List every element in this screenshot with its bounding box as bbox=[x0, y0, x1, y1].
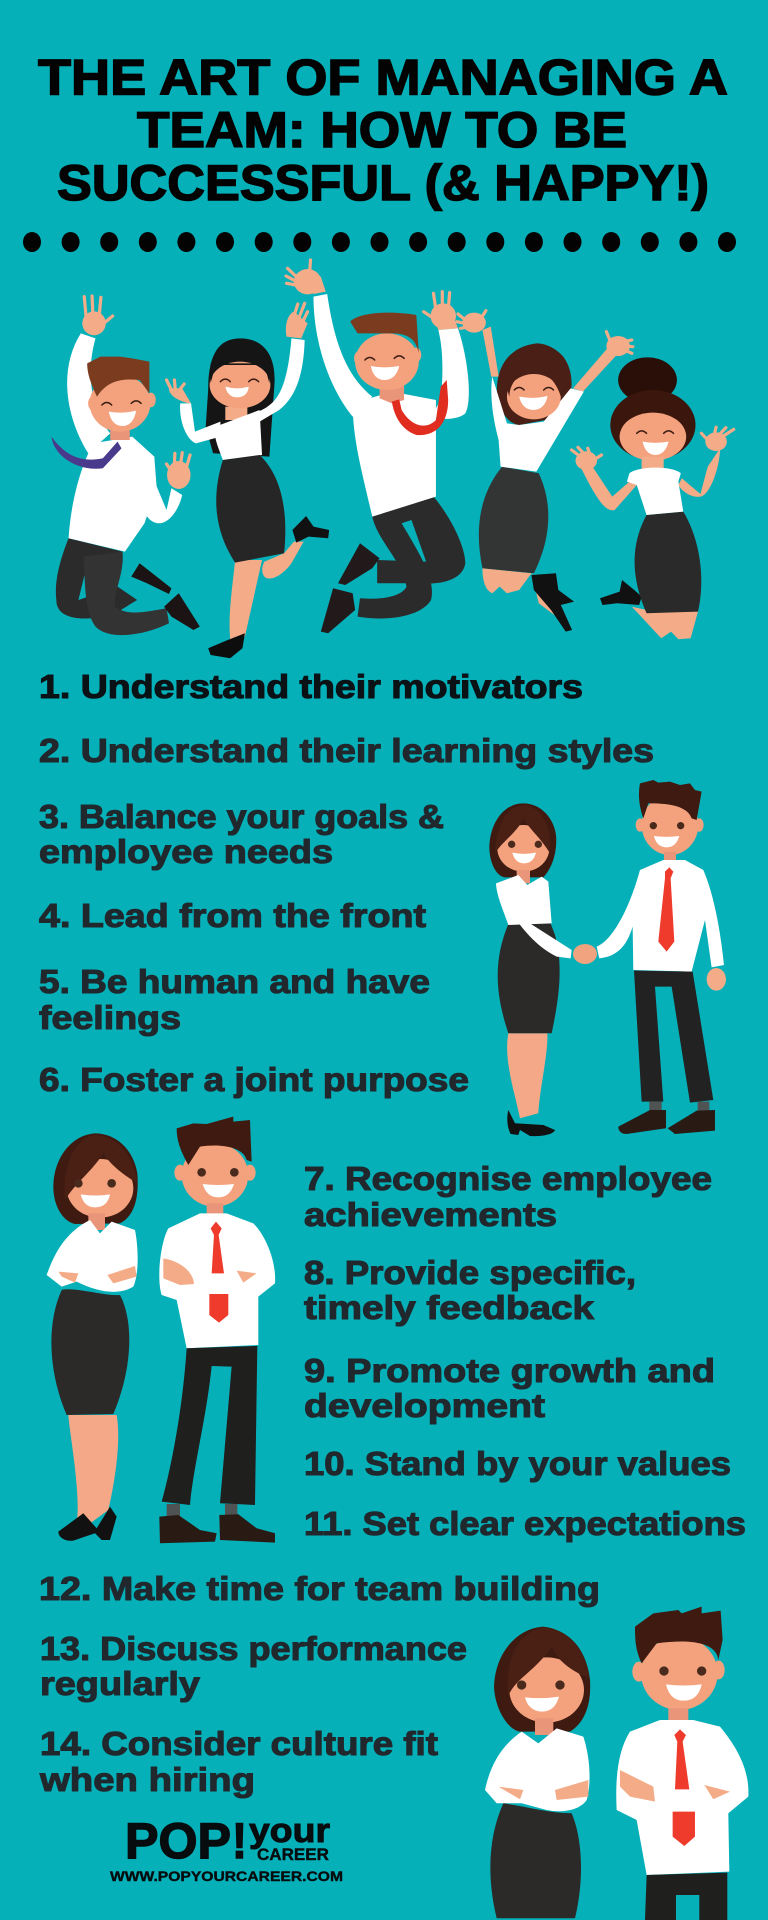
figure: woman with hair bun bbox=[572, 357, 734, 639]
logo: Pop Your Career: CAREER bbox=[257, 1845, 329, 1864]
list items 1 to 6: feelings bbox=[39, 999, 181, 1036]
title: THE ART OF MANAGING A bbox=[38, 50, 728, 106]
illustration: handshake bbox=[489, 780, 726, 1136]
logo: Pop Your Career: your bbox=[249, 1812, 330, 1850]
list items 12 to 14: 14. Consider culture fit bbox=[40, 1725, 438, 1762]
illustration: five jumping colleagues bbox=[51, 260, 734, 658]
list items 12 to 14: regularly bbox=[40, 1665, 201, 1702]
list items 7 to 11: 9. Promote growth and bbox=[304, 1352, 715, 1389]
logo: Pop Your Career: WWW.POPYOURCAREER.COM bbox=[110, 1868, 343, 1884]
list items 12 to 14 bbox=[39, 1570, 600, 1798]
figure: man shaking hands bbox=[573, 780, 726, 1134]
figure: woman close-up bbox=[485, 1627, 590, 1918]
illustration: colleagues with crossed arms bbox=[47, 1117, 275, 1543]
figure: man with crossed arms bbox=[159, 1117, 275, 1543]
list items 7 to 11: achievements bbox=[304, 1196, 557, 1233]
list items 1 to 6: employee needs bbox=[39, 833, 333, 870]
figure: woman shaking hands bbox=[489, 803, 572, 1136]
list items 1 to 6: 2. Understand their learning styles bbox=[39, 732, 654, 769]
list items 1 to 6: 3. Balance your goals & bbox=[39, 798, 444, 835]
dotted divider bbox=[23, 232, 736, 252]
figure: woman with brown bob bbox=[457, 311, 633, 632]
list items 7 to 11: timely feedback bbox=[304, 1289, 595, 1326]
title: TEAM: HOW TO BE bbox=[137, 102, 627, 158]
figure: woman with crossed arms bbox=[47, 1133, 138, 1541]
title: SUCCESSFUL (& HAPPY!) bbox=[57, 155, 709, 211]
list items 1 to 6: 6. Foster a joint purpose bbox=[39, 1061, 469, 1098]
title bbox=[38, 50, 728, 211]
list items 12 to 14: 13. Discuss performance bbox=[40, 1630, 467, 1667]
list items 7 to 11: 8. Provide specific, bbox=[304, 1254, 636, 1291]
figure: man with red tie bbox=[286, 260, 469, 633]
list items 1 to 6: 5. Be human and have bbox=[39, 963, 430, 1000]
figure: man close-up bbox=[616, 1607, 748, 1920]
list items 1 to 6: 1. Understand their motivators bbox=[39, 668, 583, 705]
logo: Pop Your Career bbox=[110, 1812, 343, 1884]
list items 12 to 14: 12. Make time for team building bbox=[39, 1570, 600, 1607]
logo: Pop Your Career: ! bbox=[232, 1813, 247, 1869]
figure: man with purple tie bbox=[51, 296, 200, 635]
list items 1 to 6 bbox=[39, 668, 654, 1098]
illustration: close-up colleagues bbox=[485, 1607, 748, 1920]
list items 7 to 11: development bbox=[304, 1387, 545, 1424]
list items 7 to 11: 7. Recognise employee bbox=[304, 1160, 712, 1197]
list items 7 to 11: 11. Set clear expectations bbox=[304, 1505, 746, 1542]
list items 1 to 6: 4. Lead from the front bbox=[39, 897, 426, 934]
figure: woman with black hair bbox=[167, 303, 329, 658]
list items 7 to 11: 10. Stand by your values bbox=[304, 1445, 731, 1482]
list items 12 to 14: when hiring bbox=[39, 1761, 255, 1798]
list items 7 to 11 bbox=[304, 1160, 746, 1542]
logo: Pop Your Career: POP bbox=[125, 1813, 231, 1869]
